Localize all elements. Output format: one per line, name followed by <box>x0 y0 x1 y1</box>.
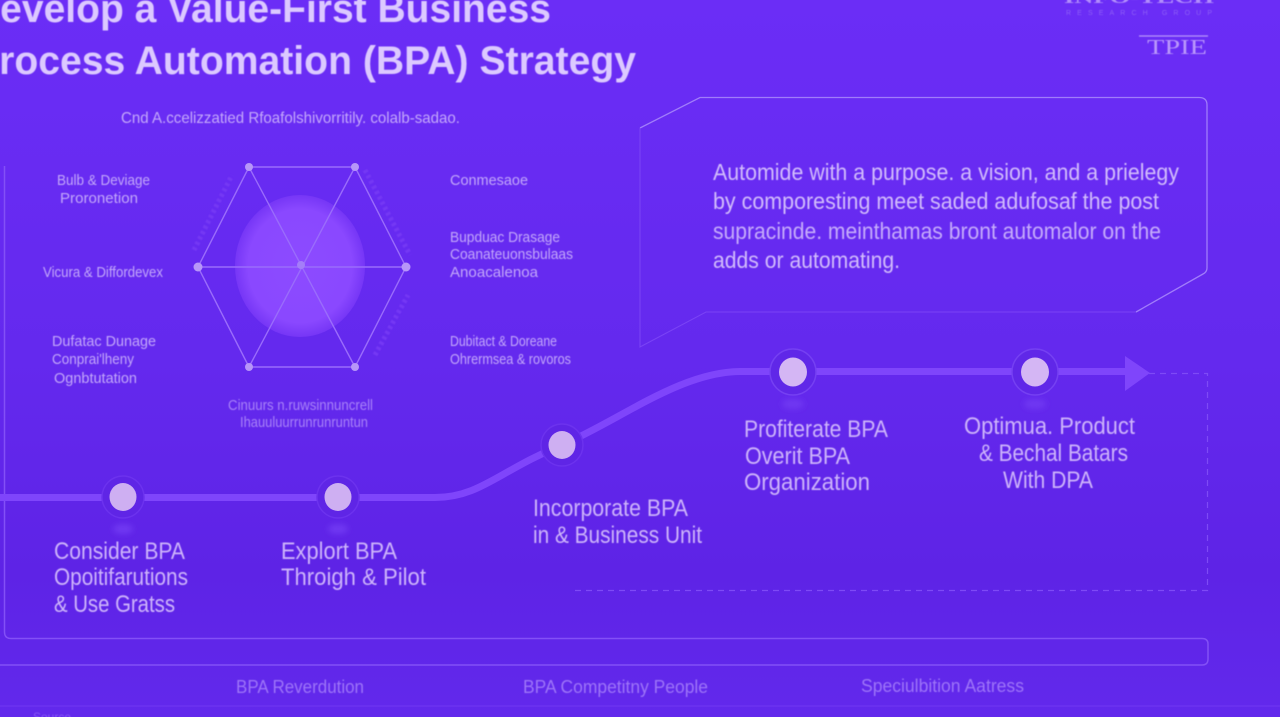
hexagon vertex dots <box>194 163 410 371</box>
hexagon labels left: Proronetion <box>60 191 138 207</box>
timeline arrow <box>1125 356 1150 391</box>
hexagon label bottom: Ihauuluurrunrunruntun <box>240 415 368 431</box>
callout text: by comporesting meet saded adufosaf the post <box>713 188 1160 214</box>
hexagon subtitle: Cnd A.ccelizzatied Rfoafolshivorritily. colalb-sadao. <box>121 110 460 127</box>
left frame line <box>0 166 1208 665</box>
panel: purpose callout <box>640 98 1207 347</box>
hexagon labels right <box>450 173 573 368</box>
hexagon labels left: Conprai'lheny <box>52 352 135 368</box>
step label 5 <box>964 413 1135 494</box>
step label 1: & Use Gratss <box>54 591 175 618</box>
step label 1: Opoitifarutions <box>54 564 188 591</box>
timeline path <box>0 372 1126 498</box>
timeline node 3 <box>541 424 583 466</box>
logo: Info-Tech <box>1064 0 1214 17</box>
step label 3: Incorporate BPA <box>533 495 688 522</box>
logo: TPIE <box>1139 35 1208 59</box>
hexagon labels right: Ohrermsea & rovoros <box>450 352 571 368</box>
hexagon labels left: Bulb & Deviage <box>57 173 150 189</box>
hexagon outline and spokes <box>198 167 406 367</box>
footer categories: BPA Reverdution <box>236 677 364 697</box>
step label 5: With DPA <box>1003 467 1093 494</box>
step label 3: in & Business Unit <box>533 522 702 549</box>
step label 4: Organization <box>744 469 870 496</box>
logo: Info-Tech: RESEARCH GROUP <box>1066 10 1212 17</box>
hexagon label bottom: Cinuurs n.ruwsinnuncrell <box>228 398 373 414</box>
hexagon labels left: Vicura & Diffordevex <box>43 265 164 281</box>
timeline node 1 <box>102 476 144 534</box>
footer categories <box>236 676 1024 697</box>
hexagon labels left: Ognbtutation <box>54 371 137 387</box>
callout text: adds or automating. <box>713 247 900 273</box>
footer rule <box>0 705 1280 707</box>
hexagon label bottom <box>228 398 373 431</box>
callout text <box>713 159 1179 273</box>
faint outer hexagon labels <box>194 170 410 355</box>
dashed extension <box>575 374 1208 590</box>
step label 5: Optimua. Product <box>964 413 1135 440</box>
step label 2: Explort BPA <box>281 538 397 565</box>
callout outline dim <box>640 128 1136 347</box>
hexagon labels left <box>43 173 164 387</box>
step label 1: Consider BPA <box>54 538 185 565</box>
hexagon labels right: Coanateuonsbulaas <box>450 247 573 263</box>
hexagon labels right: Dubitact & Doreane <box>450 334 557 350</box>
step label 2: Throigh & Pilot <box>281 564 426 591</box>
panel: capability hexagon <box>43 110 573 431</box>
hexagon labels right: Bupduac Drasage <box>450 230 560 246</box>
title <box>0 0 637 83</box>
timeline node 2 <box>317 476 359 534</box>
callout text: Automide with a purpose. a vision, and a prielegy <box>713 159 1179 185</box>
center orb <box>235 195 365 337</box>
callout text: supracinde. meinthamas bront automalor on the <box>713 218 1161 244</box>
step label 1 <box>54 538 188 618</box>
hexagon labels right: Conmesaoe <box>450 173 528 189</box>
step label 4: Profiterate BPA <box>744 416 888 443</box>
logo: TPIE: TPIE <box>1147 35 1207 59</box>
step label 3 <box>533 495 702 549</box>
hexagon labels left: Dufatac Dunage <box>52 334 156 350</box>
footer categories: Speciulbition Aatress <box>861 676 1024 696</box>
step label 4 <box>744 416 888 496</box>
step label 2 <box>281 538 426 591</box>
callout outline bright <box>640 98 1207 312</box>
step label 4: Overit BPA <box>745 443 850 470</box>
hexagon labels right: Anoacalenoa <box>450 265 539 281</box>
timeline node 5 <box>1012 349 1058 409</box>
step label 5: & Bechal Batars <box>979 440 1128 467</box>
timeline node 4 <box>770 349 816 409</box>
footer categories: BPA Competitny People <box>523 677 708 697</box>
